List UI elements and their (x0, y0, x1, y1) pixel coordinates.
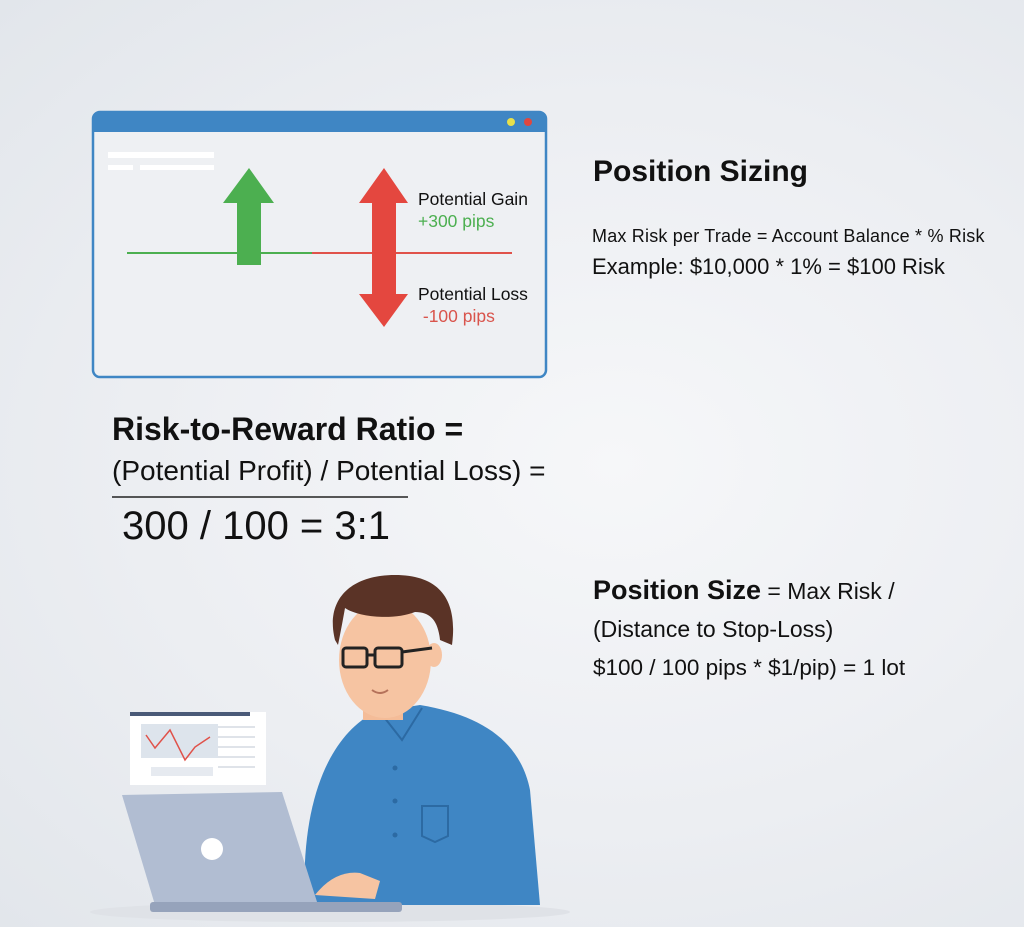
heading: position sizing: Position Sizing (593, 155, 808, 188)
icon: green up arrow (223, 168, 274, 265)
heading: risk-to-reward: Risk-to-Reward Ratio = (112, 411, 463, 447)
text: position size formula: $100 / 100 pips * $1/pip) = 1 lot (593, 655, 905, 680)
text: position size formula (593, 575, 905, 680)
label: potential gain (418, 189, 528, 231)
label: potential loss: Potential Loss (418, 284, 528, 304)
text: max risk formula: Max Risk per Trade = Account Balance * % Risk (592, 226, 985, 246)
icon: floating chart card (130, 712, 266, 785)
text: ratio result: 300 / 100 = 3:1 (122, 504, 390, 548)
text: example: Example: $10,000 * 1% = $100 Risk (592, 254, 945, 279)
icon: red double arrow (359, 168, 408, 327)
icon: person (90, 575, 570, 922)
label: potential loss: -100 pips (423, 306, 495, 326)
label: potential loss (418, 284, 528, 326)
text: ratio formula: (Potential Profit) / Potential Loss) = (112, 455, 545, 486)
text: position size formula: (Distance to Stop-Loss) (593, 616, 833, 642)
baseline (127, 252, 512, 254)
icon: laptop (122, 792, 402, 912)
window frame (93, 112, 546, 377)
label: potential gain: Potential Gain (418, 189, 528, 209)
text: position size formula: Position Size = Max Risk / (593, 575, 895, 605)
label: potential gain: +300 pips (418, 211, 494, 231)
